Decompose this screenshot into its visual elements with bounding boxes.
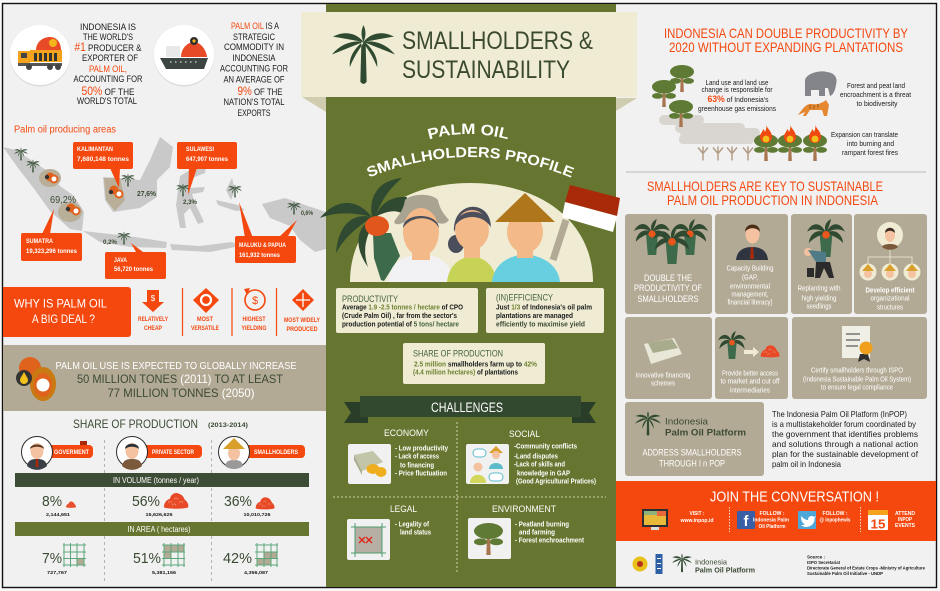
tile: capacity building: environmental [730,284,770,290]
callout: Maluku and Papua: MALUKU & PAPUA [239,243,287,249]
footer: sources: ISPO Secretariat [807,560,840,566]
challenge: legal [347,504,431,560]
text: follow facebook: Indonesia Palm [753,518,789,524]
text: strategic commodity: NATION'S TOTAL [224,97,284,108]
ribbon: challenges [344,396,596,423]
arch background [350,183,593,282]
text: economy list: - Price fluctuation [395,470,447,478]
tile: certify smallholders: Certify smallholders through ISPO [811,368,903,374]
text: forest fires: rampant forest fires [842,148,898,157]
tile: innovative financing: schemes [651,380,675,388]
tile: capacity building: Capacity Building [726,266,774,272]
text: InPOP description: and solutions through a national action [772,439,918,449]
callout: Sulawesi: 647,907 tonnes [186,157,229,163]
challenge: economy [348,428,448,484]
tile: replanting: high yielding [802,296,837,302]
ribbon: challenges: CHALLENGES [431,400,503,415]
heading: palm oil smallholders profile: SMALLHOLDERS PROFILE [367,147,574,178]
challenge: legal: LEGAL [390,504,417,515]
text: global use: 77 MILLION TONNES (2050) [108,386,255,400]
text: environment list: - Forest enchroachment [515,538,585,544]
logo: Indonesia Palm Oil Platform: Indonesia [665,416,709,428]
item: relatively cheap: RELATIVELY [138,316,169,323]
icon: farmer and palm [804,219,845,278]
challenge: environment [468,504,585,559]
footer: sources: Directorate General of Estate Crops -Ministry of Agriculture [807,566,925,572]
logo: Indonesia Palm Oil Platform small: Palm Oil Platform [695,566,755,574]
text: follow facebook [753,511,789,530]
label: government: GOVERMENT [54,449,89,456]
text: world producer: EXPORTER OF [82,53,138,64]
stat: government volume: 8% [42,493,62,510]
text: world producer: ACCOUNTING FOR [74,74,143,85]
map: percentages: 0,2% [103,240,118,246]
item: highest yielding: YIELDING [242,325,266,332]
illustration: smallholders group [320,178,620,282]
tile: replanting: seedlings [806,304,832,310]
text: InPOP description [772,409,919,469]
item: most versatile: VERSATILE [191,325,220,332]
footer: sources: Source : [807,554,825,560]
text: InPOP description: is a multistakeholder forum coordinated by [772,419,917,429]
tile: organizational structures [854,214,927,314]
bar: in area [15,522,309,536]
band: global palm oil use [3,345,326,411]
text: social list [514,444,596,486]
text: global use [56,360,296,400]
text: forest fires: Expansion can translate [831,130,898,139]
text: visit: www.inpop.id [680,518,714,524]
text: social list: knowledge in GAP [517,470,570,478]
text: world producer: THE WORLD'S [83,32,133,43]
item: relatively cheap [138,290,169,332]
stat: private sector area: 5,381,166 [152,570,177,575]
banner: why: A BIG DEAL ? [32,312,95,326]
stat: smallholders volume: 36% [224,493,252,510]
text: social list: -Community conflicts [514,444,577,450]
stat: government area: 7% [42,550,62,567]
tile: address smallholders through InPOP: ADDRESS SMALLHOLDERS [642,448,742,458]
group: smallholders [218,436,305,469]
tile: organizational structures: structures [877,304,903,312]
callout: Java [105,243,166,279]
heading: share of production: (2013-2014) [208,422,248,429]
challenge: social [466,429,596,486]
icon: calendar [868,510,888,532]
tile: capacity building [715,214,788,314]
bar: in area: IN AREA ( hectares) [128,525,191,534]
heading: smallholders are key: SMALLHOLDERS ARE KEY TO SUSTAINABLE [647,178,883,194]
stat: government area [42,543,86,575]
text: economy list [395,446,448,478]
heading: palm oil smallholders profile [367,124,574,178]
panel: strategic commodity fact [154,21,288,119]
callout: Sulawesi: SULAWESI [186,147,214,153]
map: fruit icons [45,172,123,216]
text: biodiversity: encroachment is a threat [840,90,912,99]
map of Indonesia [3,137,326,279]
text: strategic commodity: STRATEGIC [233,32,275,43]
banner: why [3,287,131,337]
text: biodiversity: to biodiversity [856,99,898,108]
map: percentages: 27,6% [137,191,157,198]
card: share of production: (4.4 million hectares) of plantations [413,370,518,376]
text: strategic commodity: EXPORTS [238,108,270,119]
stat: private sector area: 51% [133,550,161,567]
stat: smallholders area [223,543,278,575]
text: InPOP description: palm oil in Indonesia [772,459,841,469]
icon: private sector avatar [116,436,148,470]
heading: title [402,27,593,84]
callout: Sumatra: SUMATRA [26,239,54,245]
text: attend events: EVENTS [895,523,915,529]
trees [652,65,694,127]
stat: smallholders volume [224,493,275,517]
icon: facebook: f [744,513,750,530]
map: islands [3,137,326,252]
text: world producer: 50% OF THE [82,84,134,98]
callout: Java: 56,720 tonnes [114,267,154,273]
tile: double the productivity: DOUBLE THE [644,273,692,284]
logo: Indonesia Palm Oil Platform [635,411,746,438]
stat: smallholders area: 42% [223,550,252,567]
text: visit: VISIT : [690,511,705,517]
card: inefficiency: plantations are managed [496,313,573,320]
tile: capacity building: financial literacy) [728,300,772,306]
icon: tiger [798,100,829,116]
heading: title: SMALLHOLDERS & [402,27,593,55]
item: most widely produced: PRODUCED [286,326,318,333]
card: inefficiency: efficiently to maximise yield [496,322,585,328]
text: strategic commodity: AN AVERAGE OF [224,74,285,86]
icon: palm logo [332,25,395,84]
card: inefficiency: (IN)EFFICIENCY [496,292,554,304]
logo: Indonesia Palm Oil Platform small [672,554,755,574]
icon: tree [468,518,511,559]
icon: monitor [642,509,668,530]
challenge: environment: ENVIRONMENT [492,504,556,515]
text: strategic commodity: INDONESIA [232,53,276,64]
bar: in volume [15,473,309,487]
text: world producer [74,22,143,107]
text: land use: change is responsible for [702,85,773,94]
footer: sources: Sustainable Palm Oil Initiative - UNDP [807,571,884,577]
banner: why: WHY IS PALM OIL [14,296,107,310]
icon: Indonesian flag [553,185,620,260]
icon: palm trees [634,219,708,264]
tile: better market access: intermediaries [730,388,770,394]
icon: facebook [737,511,755,530]
heading: palm oil smallholders profile: PALM OIL [428,124,508,140]
tile: innovative financing: Innovative financing [636,372,691,380]
text: InPOP description: the government that identifies problems [772,429,918,439]
item: most widely produced [284,289,321,333]
text: follow facebook: Oil Platform [758,524,786,530]
text: strategic commodity [220,21,288,119]
item: highest yielding [242,288,266,332]
text: social list: -Lack of skills and [514,462,565,468]
icon: certificate [842,326,872,362]
callout: Maluku and Papua: 161,932 tonnes [239,253,281,259]
icon: people talking [466,444,509,484]
callout: Sulawesi [177,142,237,195]
text: economy list: to financing [400,462,434,470]
icon: smallholder avatar [218,436,250,469]
icon: money and coins [348,444,391,484]
text: legal list: - Legality of [395,522,430,528]
stat: private sector volume: 56% [132,493,160,510]
text: strategic commodity: COMMODITY IN [224,42,284,53]
tile: replanting: Replanting with [798,286,841,292]
tile: organizational structures: organizational [870,296,910,302]
tile: capacity building: (GAP, [742,274,758,282]
text: global use: PALM OIL USE IS EXPECTED TO GLOBALLY INCREASE [56,360,296,372]
icon: palm fruit and oil drop [16,357,56,401]
tile: better market access: to market and cut off [720,378,780,386]
card: productivity: PRODUCTIVITY [342,294,399,305]
icon: org chart [860,222,920,280]
dead trees [698,146,753,160]
card: productivity: (Crude Palm Oil) , far from the sector's [342,313,457,320]
band: join the conversation [616,481,936,541]
stat: smallholders area: 4,356,087 [244,570,269,575]
text: land use: Land use and land use [706,78,768,87]
tile: address smallholders through InPOP [625,402,764,476]
map: percentages: 2,3% [183,200,198,206]
text: world producer: PALM OIL, [89,64,127,75]
icon: truck with palm fruit [10,25,70,86]
card: inefficiency: Just 1/3 of Indonesia's oil palm [496,304,592,312]
icon: businessman [736,224,768,260]
text: world producer: INDONESIA IS [80,22,136,33]
text: attend events: INPOP [898,517,912,523]
text: follow facebook: FOLLOW : [760,511,785,517]
stat: government volume [42,493,76,517]
text: environment list: - Peatland burning [515,522,569,528]
map: percentages: 69,2% [50,194,76,206]
text: strategic commodity: PALM OIL IS A [231,21,279,32]
palm tree [320,178,407,281]
icon: banknote stack [644,338,682,364]
group: government [22,436,93,470]
map: highlighted areas [39,169,125,222]
bar: in volume: IN VOLUME (tonnes / year) [113,476,199,485]
text: world producer: WORLD'S TOTAL [77,96,137,107]
card: productivity [336,288,478,333]
icon: palm to fruit [718,331,780,359]
callout: Sumatra: 19,323,296 tonnes [26,249,78,255]
challenge: economy: ECONOMY [384,428,430,439]
stat: government volume: 2,144,651 [46,512,71,517]
icon: elephant [805,71,837,96]
text: biodiversity [840,81,912,108]
callout: Kalimantan: 7,680,148 tonnes [77,157,130,163]
tile: double the productivity: SMALLHOLDERS [638,294,698,305]
item: relatively cheap: $ [151,294,156,303]
tile: address smallholders through InPOP: THROUGH I n POP [659,458,725,470]
item: relatively cheap: CHEAP [144,325,163,332]
footer: sources [807,554,925,577]
text: attend events: ATTEND [895,511,915,517]
label: private sector: PRIVATE SECTOR [152,449,194,456]
person: farmer with conical hat [492,193,560,282]
text: economy list: - Low productivity [395,446,448,452]
tile: certify smallholders [792,317,927,399]
tile: double the productivity [625,214,712,314]
text: follow twitter: @ inpophewis [820,518,850,524]
item: highest yielding: HIGHEST [242,316,266,323]
tile: organizational structures: Develop efficient [866,288,915,294]
tile: double the productivity: PRODUCTIVITY OF [634,283,702,294]
stat: private sector volume [132,493,188,517]
person: woman [447,207,497,282]
tile: certify smallholders: to ensure legal compliance [821,384,893,392]
text: global use: 50 MILLION TONES (2011) TO AT LEAST [77,372,284,386]
text: strategic commodity: ACCOUNTING FOR [220,64,288,74]
logo: ministry emblem [632,556,648,572]
tile: replanting [791,214,852,314]
icon: calendar: 15 [870,516,886,532]
text: attend events [895,511,915,529]
logo: Indonesia Palm Oil Platform small: Indonesia [695,558,728,566]
tile: better market access [715,317,788,399]
band: join the conversation: JOIN THE CONVERSATION ! [710,488,879,506]
logo: UNDP [656,554,662,574]
card: share of production: 2.5 million smallholders farm up to 42% [414,362,538,368]
stat: private sector area [133,543,185,575]
map: percentages [50,191,314,246]
panel: Indonesia producer fact [10,22,143,107]
item: most versatile: MOST [197,316,213,323]
callout: Kalimantan [73,142,133,188]
text: forest fires: into burning and [847,139,894,148]
item: most widely produced: MOST WIDELY [284,317,321,324]
icon: government avatar [22,436,52,470]
item: highest yielding: $ [252,295,258,307]
heading: palm oil producing areas: Palm oil producing areas [14,124,116,136]
text: environment list: and farming [519,530,555,536]
callout: Maluku and Papua [235,202,297,263]
text: land use: greenhouse gas emissions [698,104,776,113]
smoke [659,115,760,144]
title banner [301,12,637,112]
text: environment list [515,522,585,544]
text: social list: -Land disputes [514,454,558,460]
text: social list: (Good Agricultural Pratices) [516,478,596,486]
tile: certify smallholders: (Indonesia Sustainable Palm Oil System) [803,376,911,384]
illustration: forest and smoke [652,65,827,161]
map: palm icons [14,147,301,245]
tile: capacity building: management, [732,292,769,298]
tile: innovative financing [625,317,712,399]
logo: Indonesia Palm Oil Platform: Palm Oil Platform [665,428,746,438]
card: productivity: production potential of 5 tons/ hectare [342,322,459,328]
text: world producer: #1 PRODUCER & [74,40,142,54]
heading: share of production: SHARE OF PRODUCTION [73,417,198,431]
stat: government area: 727,767 [47,570,68,575]
person: man with hat [388,195,453,282]
text: economy list: - Lack of access [395,454,439,460]
text: InPOP description: plan for the sustainable development of [772,449,919,459]
heading: title: SUSTAINABILITY [402,56,570,84]
card: share of production: SHARE OF PRODUCTION [413,348,503,360]
callout: Java: JAVA [114,258,128,264]
text: visit [680,511,714,524]
text: legal list: land status [400,530,431,536]
text: strategic commodity: 9% OF THE [238,84,282,98]
text: InPOP description: The Indonesia Palm Oil Platform (InPOP) [772,409,907,419]
callout: Kalimantan: KALIMANTAN [77,147,113,153]
heading: double productivity [664,25,909,55]
challenge: social: SOCIAL [509,429,540,440]
text: forest fires [831,130,898,157]
stat: smallholders volume: 10,010,726 [244,512,271,517]
text: land use: 63% of Indonesia's [708,94,769,105]
panel: centre column [326,4,616,587]
card: productivity: Average 1.9 -2.5 tonnes / hectare of CPO [342,304,463,312]
heading: smallholders are key: PALM OIL PRODUCTION IN INDONESIA [667,192,879,208]
map: percentages: 0,6% [301,211,314,217]
card: share of production [403,343,545,384]
text: legal list [395,522,431,536]
footer: logos [632,554,755,574]
panel: why is palm oil a big deal [3,287,321,337]
text: land use [698,78,776,113]
label: smallholders: SMALLHOLDERS [254,449,299,456]
card: inefficiency [486,288,604,333]
group: private sector [116,436,202,470]
tile: better market access: Provide better access [722,370,778,378]
stat: private sector volume: 15,626,625 [146,512,173,517]
text: follow twitter [820,511,850,524]
icon: land plot with crosses [347,519,390,560]
burning trees [754,124,827,161]
text: follow twitter: FOLLOW : [822,511,848,517]
icon: twitter [798,511,816,529]
heading: smallholders are key [647,178,883,208]
callout: Sumatra [21,209,82,261]
icon: cargo ship [154,25,214,86]
item: most versatile [191,288,220,332]
text: biodiversity: Forest and peat land [847,81,905,90]
